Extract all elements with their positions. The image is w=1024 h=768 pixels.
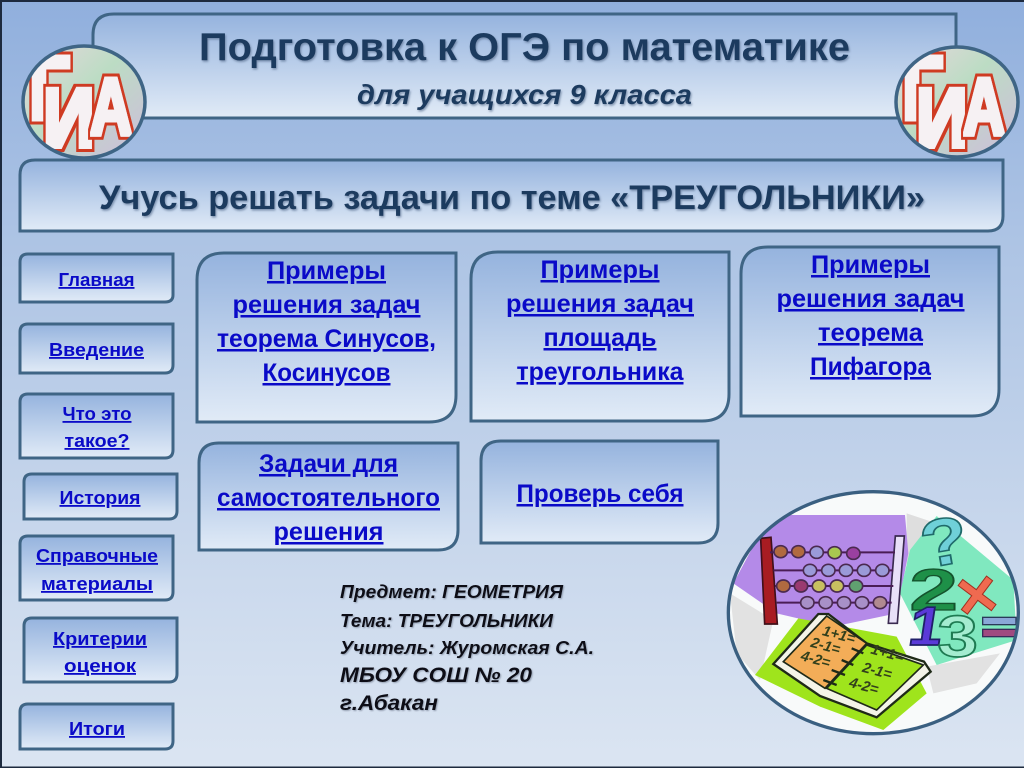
text block: lesson details: МБОУ СОШ № 20 [340,664,532,687]
panel: Pythagoras examples: теорема [818,319,924,347]
math symbols: 3 [937,604,978,669]
panel: topic heading: Учусь решать задачи по теме «ТРЕУГОЛЬНИКИ» [99,179,925,217]
panel: triangle area examples: решения задач [506,290,694,318]
subtitle: для учащихся 9 класса [357,79,692,110]
nav button: Главная: Главная [58,270,134,290]
nav button: Что это такое?: Что это [62,404,132,424]
nav button: Введение [20,324,173,373]
teal panel [900,516,1017,665]
open book: 1+1= [821,623,857,648]
nav button: Справочные материалы: Справочные [36,546,158,566]
icon: right GIA logo: И [916,71,968,165]
grey shapes [730,593,773,680]
panel: independent practice: самостоятельного [217,484,440,512]
text block: lesson details: г.Абакан [340,692,438,715]
text block: lesson details [340,582,594,715]
lime panel [755,618,927,730]
nav button: История: История [60,488,140,508]
panel: triangle area examples: площадь [544,324,656,352]
open book: 4-2= [798,648,832,672]
icon: left GIA logo: И [43,71,95,165]
purple panel [733,515,908,627]
nav button: Введение: Введение [49,340,144,360]
nav button: Критерии оценок [24,618,177,682]
panel: sines and cosines examples: теорема Синусов, [217,325,436,353]
math symbols [909,517,1016,658]
nav button: Итоги: Итоги [69,719,125,739]
panel: self check: Проверь себя [516,480,684,508]
panel: topic heading [20,160,1003,231]
nav button: Справочные материалы: материалы [41,574,153,594]
panel: independent practice: решения [274,518,384,546]
icon: right GIA logo: А [963,62,1005,153]
panel: sines and cosines examples: Косинусов [262,359,390,387]
math symbols: 1 [905,596,948,657]
icon: left GIA logo [23,38,145,165]
text block: lesson details: Тема: ТРЕУГОЛЬНИКИ [340,611,554,631]
math symbols: 2 [909,557,958,623]
panel: sines and cosines examples: решения задач [232,291,420,319]
panel: Pythagoras examples [741,247,999,416]
math symbols: × [951,553,1003,636]
open book [773,614,931,717]
panel: sines and cosines examples [197,253,456,422]
panel: Pythagoras examples: Примеры [811,251,930,279]
abacus [761,536,904,624]
nav button: Критерии оценок: оценок [64,656,137,676]
panel: Pythagoras examples: Пифагора [810,353,932,381]
open book: 1+1= [869,642,906,666]
text block: lesson details: Предмет: ГЕОМЕТРИЯ [340,582,564,602]
open book: 2-1= [860,660,894,683]
icon: left GIA logo: А [90,62,132,153]
icon: right GIA logo: Г [902,38,943,139]
open book: 2-1= [808,635,842,658]
title: Подготовка к ОГЭ по математике [199,26,850,69]
nav button: Критерии оценок: Критерии [53,629,147,649]
panel: independent practice: Задачи для [259,450,398,478]
nav button: Что это такое?: такое? [64,431,130,451]
icon: right GIA logo [896,38,1018,165]
nav button: Итоги [20,704,173,749]
panel: independent practice [199,443,458,550]
math symbols: ? [915,502,974,583]
panel: triangle area examples: треугольника [516,358,685,386]
panel: sines and cosines examples: Примеры [267,257,386,285]
nav button: Главная [20,254,173,302]
panel: Pythagoras examples: решения задач [776,285,964,313]
open book: 4-2= [846,675,881,698]
nav button: Справочные материалы [20,536,173,600]
icon: left GIA logo: Г [29,38,70,139]
nav button: История [24,474,177,519]
panel: triangle area examples [471,252,729,421]
nav button: Что это такое? [20,394,173,458]
panel: self check [481,441,718,543]
panel: title banner [93,14,956,118]
illustration: abacus, book and numbers [728,492,1018,734]
panel: triangle area examples: Примеры [540,256,660,284]
text block: lesson details: Учитель: Журомская С.А. [340,638,594,658]
